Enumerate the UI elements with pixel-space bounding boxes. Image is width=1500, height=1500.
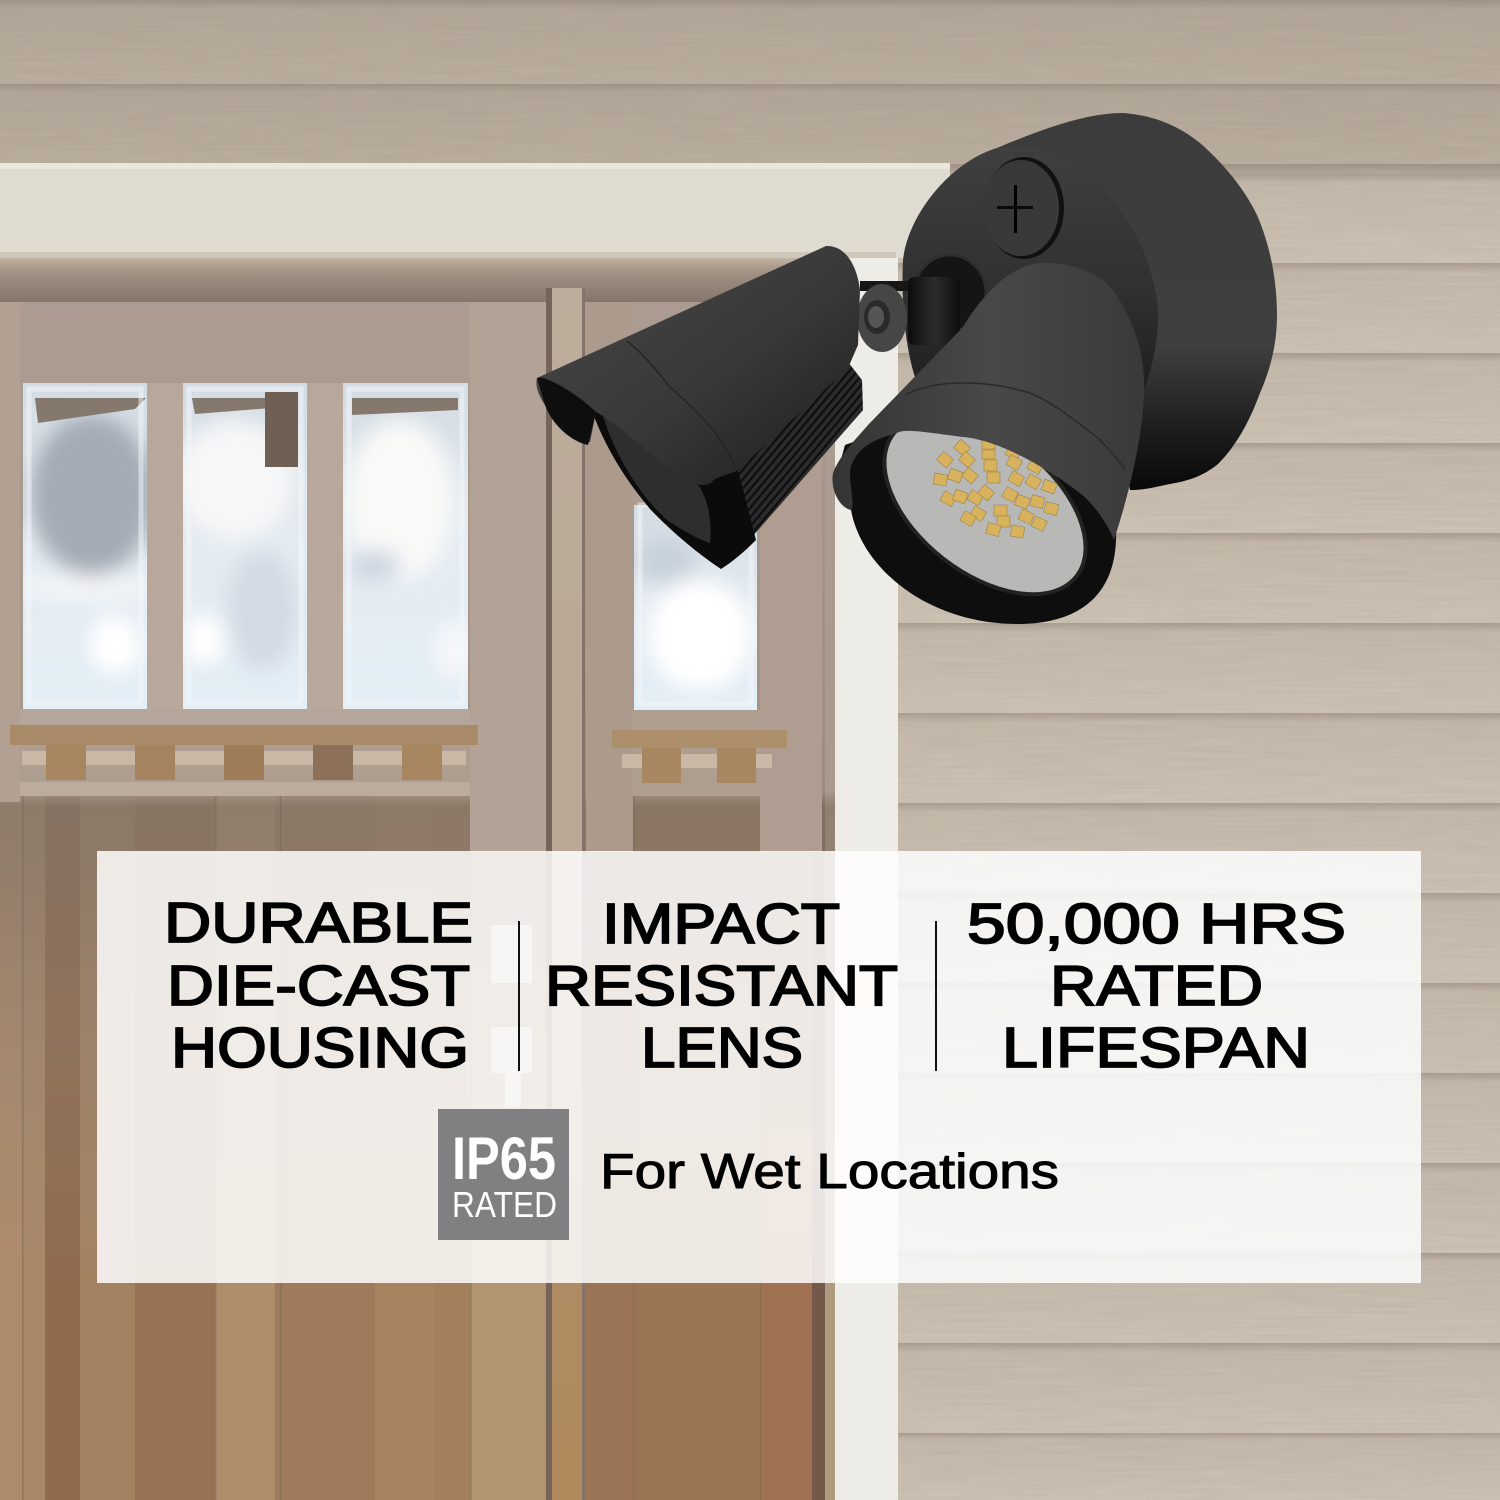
- bezel: [834, 425, 1116, 624]
- bezel: [590, 405, 756, 569]
- faint door handle: [491, 925, 532, 1107]
- IP65 rated badge: IP65: [452, 1125, 556, 1192]
- feature: 50,000 hours rated lifespan: LIFESPAN: [1002, 1016, 1310, 1080]
- feature: durable die-cast housing: HOUSING: [171, 1016, 469, 1080]
- feature: 50,000 hours rated lifespan: [967, 892, 1346, 1080]
- lens: [852, 380, 1118, 630]
- window reflections and bevels: [29, 389, 751, 704]
- door trim: [0, 163, 950, 1500]
- wet locations label: For Wet Locations: [600, 1145, 1059, 1199]
- windows: [15, 383, 757, 710]
- feature: impact resistant lens: LENS: [641, 1016, 803, 1080]
- feature: impact resistant lens: IMPACT: [602, 892, 840, 956]
- cooling fins: [725, 362, 863, 537]
- feature: impact resistant lens: [545, 892, 898, 1080]
- translucent feature panel: [97, 851, 1421, 1283]
- LED chips: [933, 439, 1059, 538]
- pale upper wash: [0, 300, 835, 1283]
- feature: durable die-cast housing: [164, 891, 473, 1080]
- hood: [536, 246, 860, 485]
- feature: 50,000 hours rated lifespan: 50,000 HRS: [967, 892, 1346, 956]
- feature: impact resistant lens: RESISTANT: [545, 954, 898, 1018]
- IP65 rated badge: RATED: [452, 1184, 557, 1225]
- hood: [832, 263, 1144, 540]
- right lamp: [832, 263, 1144, 630]
- mounting plate: [903, 113, 1277, 490]
- divider two: [935, 921, 937, 1071]
- light fixture: [536, 113, 1277, 630]
- divider one: [518, 921, 520, 1071]
- feature: durable die-cast housing: DURABLE: [164, 891, 473, 955]
- door: [0, 258, 835, 1500]
- IP65 rated badge: [438, 1109, 569, 1240]
- feature: 50,000 hours rated lifespan: RATED: [1050, 954, 1263, 1018]
- feature: durable die-cast housing: DIE-CAST: [167, 954, 470, 1018]
- vertical wood boards: [0, 288, 835, 1500]
- lens: [602, 413, 711, 543]
- mantel shelf and blocks: [10, 725, 787, 783]
- swivel joint: [857, 255, 986, 352]
- left lamp: [536, 246, 863, 569]
